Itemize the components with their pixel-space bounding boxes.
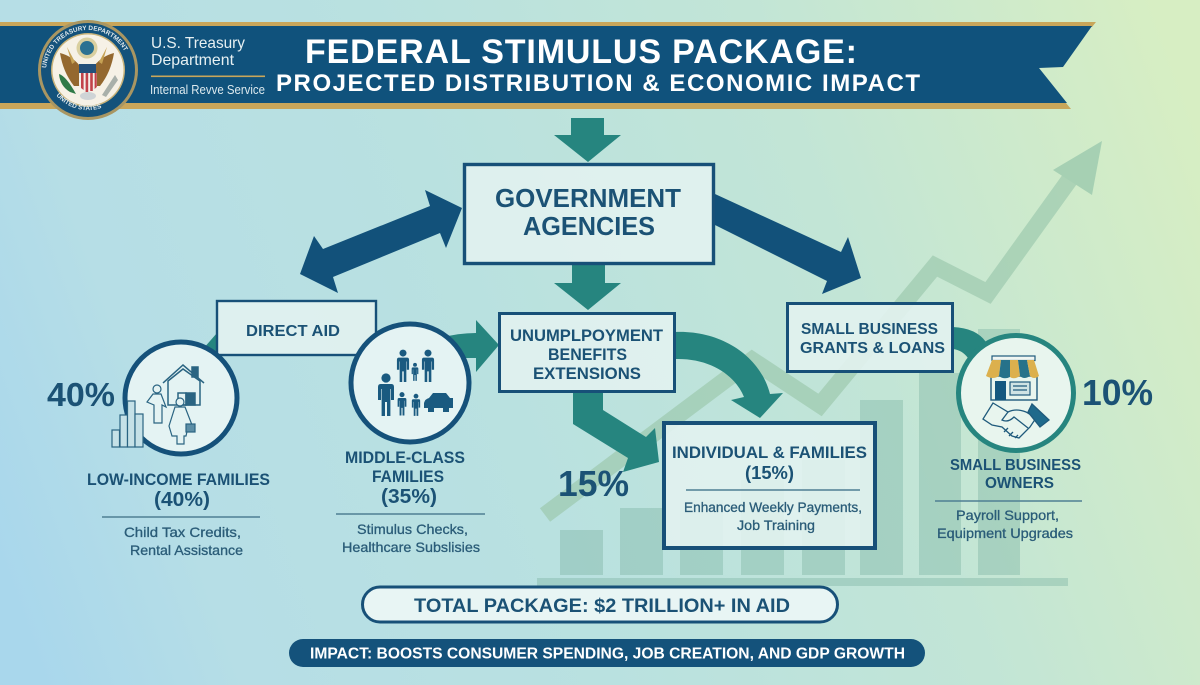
text: stimulus checks: Stimulus Checks, xyxy=(357,521,468,537)
gold divider xyxy=(151,76,265,77)
icon: car xyxy=(424,393,453,412)
department label: U.S. Treasury xyxy=(151,35,245,52)
icon: treasury seal: UNITED STATES xyxy=(57,92,102,110)
panel: individual and families xyxy=(664,423,875,548)
icon: small bars xyxy=(112,401,143,447)
icon: house xyxy=(163,365,204,405)
icon: middle class families xyxy=(351,324,469,442)
label: direct aid: DIRECT AID xyxy=(246,323,340,340)
heading: government: GOVERNMENT xyxy=(495,183,681,213)
arrow: unemployment down to individuals xyxy=(573,392,659,472)
icon: low income families xyxy=(112,342,237,454)
arrow: agencies to unemployment xyxy=(554,264,621,310)
icon: small business owners xyxy=(958,336,1074,450)
label: owners: OWNERS xyxy=(985,475,1054,492)
label: low income share: (40%) xyxy=(154,489,210,511)
arrow: agencies to small business xyxy=(715,194,861,294)
stat: 40 percent: 40% xyxy=(47,376,115,413)
arrow: direct aid to low income xyxy=(203,333,217,356)
icon: treasury seal: UNITED TREASURY DEPARTMENT xyxy=(42,26,128,68)
banner title line 2: PROJECTED DISTRIBUTION & ECONOMIC IMPACT xyxy=(276,70,920,97)
panel: unemployment benefits xyxy=(500,314,674,392)
label: small business owners heading: SMALL BUSINESS xyxy=(950,457,1081,474)
label: benefits: BENEFITS xyxy=(548,345,627,364)
label: extensions: EXTENSIONS xyxy=(533,364,641,383)
label: grants and loans: GRANTS & LOANS xyxy=(800,340,945,357)
heading: individual and families: INDIVIDUAL & FAMILIES xyxy=(672,443,867,462)
header banner xyxy=(0,22,1096,109)
arrow: family circle to unemployment xyxy=(440,320,499,372)
impact pill xyxy=(289,639,925,667)
panel: direct aid xyxy=(217,301,376,355)
divider xyxy=(686,489,860,491)
heading: share: (15%) xyxy=(745,463,794,483)
stat: 10 percent: 10% xyxy=(1082,372,1153,413)
heading: agencies: AGENCIES xyxy=(523,211,655,241)
arrow: agencies to direct aid xyxy=(300,190,462,293)
label: middle class share: (35%) xyxy=(381,486,437,508)
total package pill xyxy=(362,587,838,622)
label: small business: SMALL BUSINESS xyxy=(801,321,938,338)
text: rental assistance: Rental Assistance xyxy=(130,542,243,558)
text: enhanced weekly payments: Enhanced Weekly Payments, xyxy=(684,500,862,515)
icon: treasury seal xyxy=(38,20,138,120)
arrow: unemployment curved to individuals xyxy=(675,332,783,418)
background bar chart xyxy=(537,329,1068,586)
text: impact statement: IMPACT: BOOSTS CONSUMER SPENDING, JOB CREATION, AND GDP GROWTH xyxy=(310,646,905,662)
banner title line 1: FEDERAL STIMULUS PACKAGE: xyxy=(305,33,857,71)
text: job training: Job Training xyxy=(737,518,815,533)
text: healthcare subsidies: Healthcare Subslisies xyxy=(342,539,480,555)
background growth arrow xyxy=(545,141,1102,515)
label: unemployment: UNUMPLPOYMENT xyxy=(510,326,664,345)
icon: storefront xyxy=(986,356,1039,400)
arrow: into government agencies xyxy=(554,118,621,162)
divider xyxy=(336,513,485,515)
divider xyxy=(935,500,1082,502)
text: equipment upgrades: Equipment Upgrades xyxy=(937,525,1073,541)
icon: mother and child xyxy=(147,385,195,444)
text: total package: TOTAL PACKAGE: $2 TRILLION+ IN AID xyxy=(414,596,790,617)
divider xyxy=(102,516,260,518)
label: families: FAMILIES xyxy=(372,467,444,486)
service label: Internal Revve Service xyxy=(150,82,265,97)
panel: government agencies xyxy=(464,164,714,264)
label: low income heading: LOW-INCOME FAMILIES xyxy=(87,470,270,489)
stat: 15 percent: 15% xyxy=(558,463,629,504)
text: payroll support: Payroll Support, xyxy=(956,507,1059,523)
icon: handshake xyxy=(983,403,1049,438)
arrow: small business box to owners xyxy=(953,327,986,358)
department label line 2: Department xyxy=(151,52,235,69)
text: child tax credits: Child Tax Credits, xyxy=(124,524,241,540)
label: middle class heading: MIDDLE-CLASS xyxy=(345,448,465,467)
panel: small business grants xyxy=(788,304,952,372)
